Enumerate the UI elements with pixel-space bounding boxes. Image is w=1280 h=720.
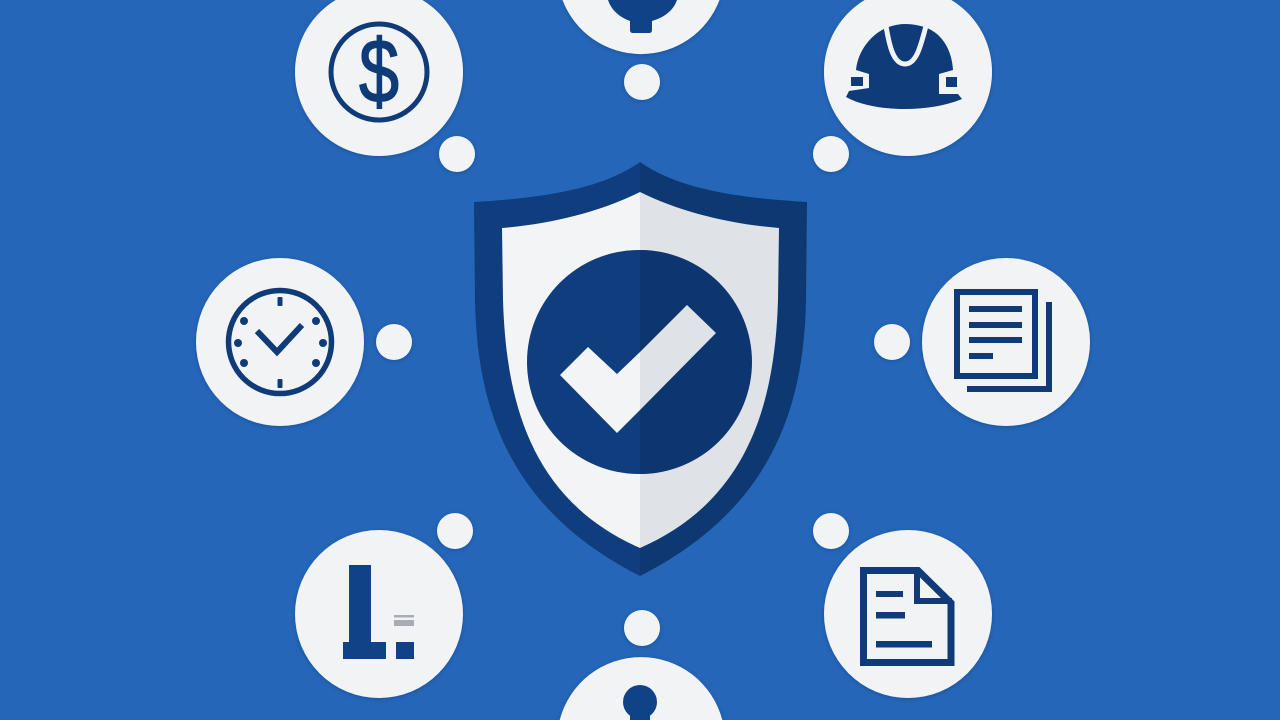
badge circle shaded half	[640, 250, 752, 474]
connector dot: documents	[874, 324, 910, 360]
node: dollar	[295, 0, 463, 156]
clock ring	[228, 290, 332, 394]
connector dot: page	[813, 513, 849, 549]
dollar circle	[295, 0, 463, 156]
connector dot: top	[624, 64, 660, 100]
folded corner	[917, 568, 952, 601]
connector dot: bottom-left	[437, 513, 473, 549]
page lines	[876, 591, 932, 648]
shield outer border right	[640, 162, 807, 576]
front page	[957, 292, 1035, 376]
clock ticks	[234, 297, 327, 388]
page outline	[864, 570, 951, 662]
shield inner left face	[502, 192, 640, 548]
inverted T block	[343, 565, 386, 659]
hard hat strap	[886, 26, 926, 64]
text lines	[969, 306, 1022, 359]
small square	[396, 642, 414, 659]
lightbulb icon	[608, 0, 677, 33]
node: lightbulb (top)	[562, 0, 720, 54]
badge circle	[527, 250, 751, 474]
clock hands	[257, 325, 302, 352]
node: documents	[922, 258, 1090, 426]
shield outer border left	[474, 162, 640, 576]
hard hat dome	[846, 24, 962, 109]
page circle	[824, 530, 992, 698]
grey bars	[394, 615, 414, 626]
dollar ring	[331, 24, 427, 120]
connector dot: clock	[376, 324, 412, 360]
top circle	[562, 0, 720, 54]
shield inner right face	[640, 192, 779, 548]
dollar sign: $	[359, 21, 399, 122]
node: hard hat	[824, 0, 992, 156]
hard hat circle	[824, 0, 992, 156]
node: person (bottom)	[560, 657, 722, 720]
connector dot: dollar	[439, 136, 475, 172]
node: page with folded corner	[824, 530, 992, 698]
clock circle	[196, 258, 364, 426]
node: clock	[196, 258, 364, 426]
person head	[623, 685, 657, 719]
blocks circle	[295, 530, 463, 698]
connector dot: bottom	[624, 610, 660, 646]
documents circle	[922, 258, 1090, 426]
person circle	[560, 657, 722, 720]
node: bottom-left blocks	[295, 530, 463, 698]
check mark left part	[560, 347, 640, 433]
check mark right part	[640, 305, 716, 410]
person neck	[630, 714, 650, 720]
left clip	[851, 77, 863, 86]
back page edge	[967, 302, 1049, 389]
right clip	[946, 77, 957, 87]
central shield	[474, 162, 807, 576]
connector dot: hard hat	[813, 136, 849, 172]
